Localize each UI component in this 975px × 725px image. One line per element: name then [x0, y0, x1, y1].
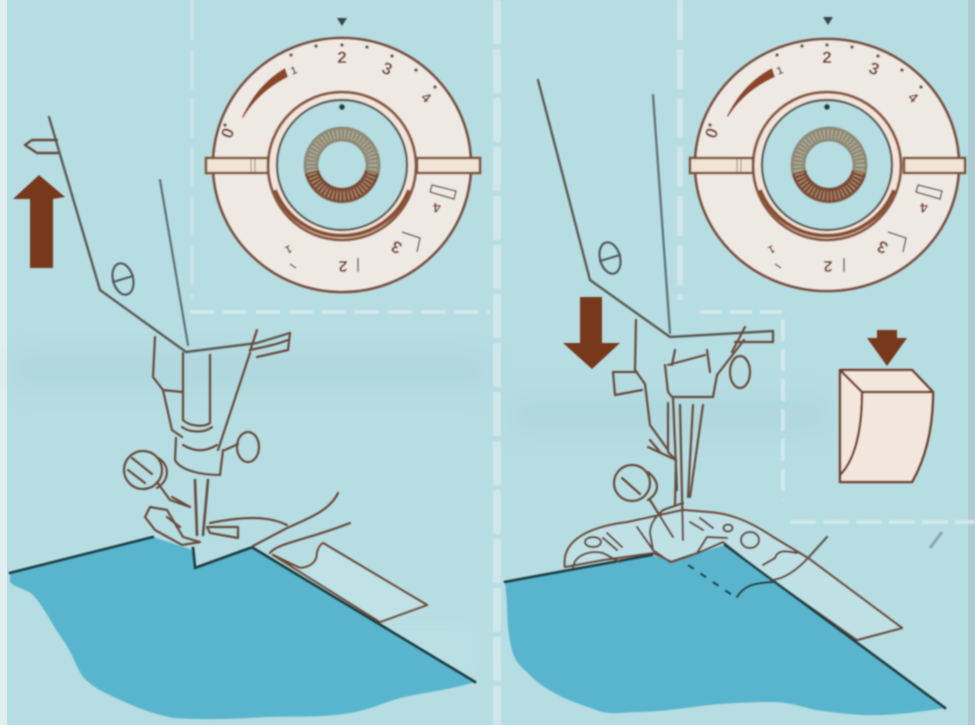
- left dial numbers: [217, 48, 441, 274]
- left dial numbers: 0: [217, 125, 238, 141]
- left needle: [195, 480, 208, 535]
- left top tab: [25, 140, 58, 153]
- right thread: [808, 537, 827, 558]
- right needle bar line: [653, 95, 670, 333]
- left dial: [206, 18, 480, 292]
- left thread tab: [250, 330, 290, 357]
- left dial knurled wheel: [311, 134, 373, 196]
- right thumb screw: [730, 356, 750, 388]
- arrow: down: [563, 297, 620, 369]
- push button: [840, 370, 933, 482]
- right dial numbers: 3: [874, 236, 891, 258]
- right knob: [614, 465, 650, 501]
- right dial side bars: [690, 158, 753, 173]
- left knob: [124, 451, 162, 489]
- right presser assembly: [538, 80, 827, 597]
- right dial numbers: 4: [920, 200, 928, 216]
- left dial numbers: 2: [337, 48, 347, 67]
- left seam guide strip: [273, 543, 427, 622]
- left dial numbers: 1: [289, 64, 299, 78]
- left fabric edges: [10, 537, 475, 682]
- right foot: [648, 447, 676, 537]
- arrow: small down onto button: [867, 330, 907, 366]
- left needle bar line: [160, 180, 188, 345]
- right dial numbers: 2: [823, 257, 832, 274]
- left dial stitch wedge: [242, 68, 288, 118]
- right dial numbers: 0: [701, 125, 722, 141]
- left thumb screw: [225, 444, 238, 450]
- right dial numbers: 1: [775, 64, 785, 78]
- right dial numbers: 3: [866, 58, 882, 79]
- right plate details: [573, 527, 653, 567]
- left dial numbers: 4: [418, 89, 435, 106]
- left arm screw: [109, 261, 137, 297]
- right thread tab: [732, 327, 773, 352]
- right guide notch: [763, 551, 808, 580]
- left presser assembly: [25, 117, 350, 553]
- left dial inner ring: [268, 92, 416, 240]
- right clamp block: [635, 320, 645, 384]
- left dial numbers: 1: [283, 242, 294, 255]
- left dial numbers: 2: [338, 257, 347, 274]
- right dial stitch wedge: [727, 68, 775, 117]
- right dial marker: [823, 17, 833, 25]
- right dial knurled wheel: [798, 134, 860, 196]
- right stitch line: [688, 565, 732, 595]
- smudge mark: [930, 532, 942, 548]
- left dial numbers: 4: [433, 200, 441, 216]
- left clamp block: [153, 337, 182, 437]
- left shank arm: [49, 117, 290, 352]
- right dial numbers: [701, 48, 928, 274]
- right seam guide plate: [565, 510, 902, 640]
- right dial inner ring: [753, 92, 901, 240]
- right dial: [690, 17, 965, 291]
- left dial numbers: 3: [379, 58, 395, 79]
- right fabric: [505, 545, 945, 715]
- left fabric: [10, 537, 475, 719]
- left foot: [145, 507, 200, 545]
- right needle: [673, 398, 703, 540]
- left threads: [210, 518, 287, 525]
- arrow: up: [13, 175, 65, 268]
- right dial numbers: 2: [822, 48, 832, 67]
- right arm screw: [596, 240, 624, 276]
- right shank arm: [538, 80, 773, 337]
- left dial marker: [337, 18, 347, 26]
- right fabric edges: [505, 545, 945, 708]
- right dial numbers: 1: [766, 242, 777, 255]
- right dial numbers: 4: [905, 89, 922, 106]
- left dial numbers: 3: [388, 236, 405, 258]
- left dial side bars: [206, 158, 268, 173]
